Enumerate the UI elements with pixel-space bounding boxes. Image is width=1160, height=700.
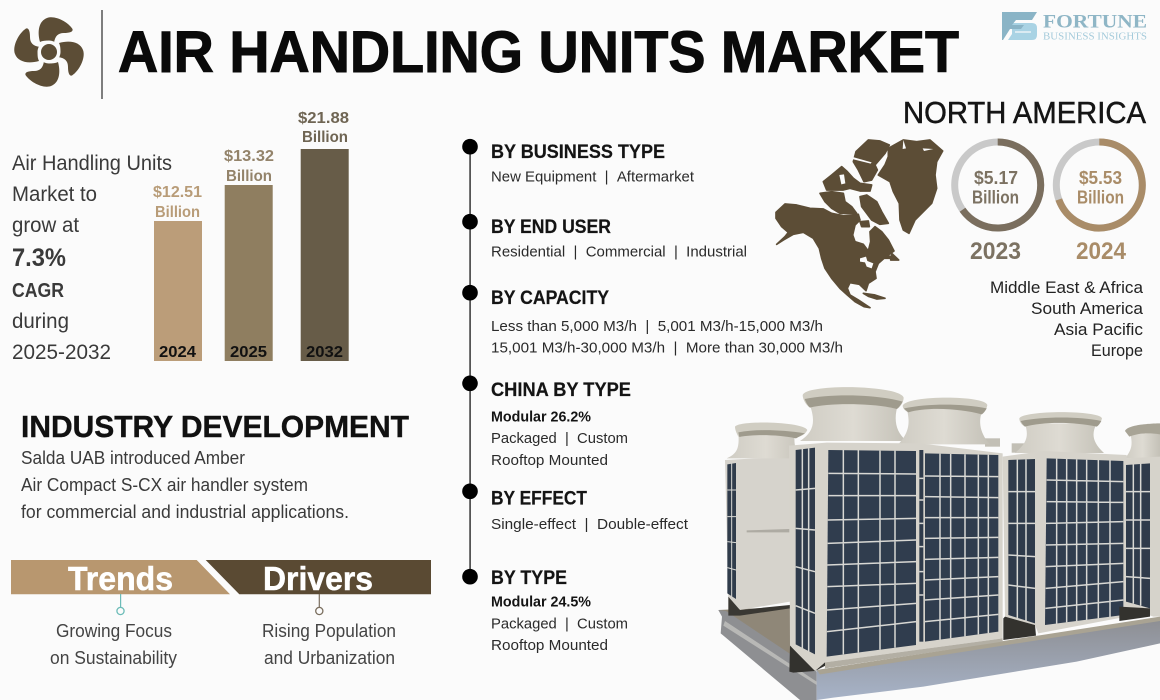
bar: 2025: $13.32: [224, 148, 274, 165]
segment: by type: BY TYPE: [491, 568, 567, 589]
text: market growth summary: 2025-2032: [12, 341, 111, 364]
text: industry development detail: Air Compact S-CX air handler system: [21, 475, 308, 495]
bar: 2025: [224, 148, 274, 361]
bar: 2032: Billion: [302, 129, 348, 146]
segment: by type: Rooftop Mounted: [491, 637, 608, 654]
chart: 2023 ring: Billion: [972, 188, 1019, 208]
text: market growth summary: 7.3%: [12, 244, 66, 272]
segment: by type: Packaged | Custom: [491, 615, 628, 632]
text: other regions: Asia Pacific: [1054, 320, 1143, 339]
bar: 2024: Billion: [155, 204, 200, 221]
segment: by capacity: 15,001 M3/h-30,000 M3/h | More than 30,000 M3/h: [491, 340, 843, 357]
segment: by effect: BY EFFECT: [491, 488, 587, 509]
panel: trends: [11, 560, 230, 668]
panel: drivers: [206, 560, 431, 668]
segment: by type: Modular 24.5%: [491, 594, 591, 611]
bar: 2025: 2025: [230, 344, 267, 361]
logo: Fortune Business Insights: FORTUNE: [1043, 12, 1147, 32]
segment: china by type: CHINA BY TYPE: [491, 380, 631, 401]
title: AIR HANDLING UNITS MARKET: [118, 20, 959, 85]
bar: 2025: Billion: [226, 168, 272, 185]
small back fans: [985, 438, 1025, 453]
bar: 2032: $21.88: [298, 110, 349, 127]
segment: by business type: BY BUSINESS TYPE: [491, 142, 665, 163]
panel: trends: on Sustainability: [50, 648, 177, 668]
segment: by capacity: BY CAPACITY: [491, 288, 609, 309]
back left unit: [725, 423, 807, 616]
heading: industry development: INDUSTRY DEVELOPMENT: [21, 409, 409, 444]
segment: china by type: [462, 376, 631, 469]
panel: drivers: Rising Population: [262, 621, 396, 641]
text: industry development detail: [21, 448, 349, 522]
text: market growth summary: during: [12, 310, 69, 333]
text: market growth summary: Market to: [12, 183, 97, 206]
logo: Fortune Business Insights: BUSINESS INSIGHTS: [1043, 32, 1147, 42]
segment: by capacity: [462, 285, 843, 357]
chart: 2024 ring: 2024: [1076, 238, 1127, 265]
chart: 2023 ring: 2023: [970, 238, 1021, 265]
chart: 2023 ring: [955, 142, 1041, 265]
chart: 2024 ring: $5.53: [1079, 168, 1122, 188]
chart: 2023 ring: $5.17: [974, 168, 1018, 188]
panel: drivers: Drivers: [263, 560, 373, 597]
front unit C: [1119, 457, 1160, 621]
segment: by end user: [462, 214, 747, 261]
chart: 2024 ring: Billion: [1077, 188, 1124, 208]
fan housings: [800, 387, 1160, 458]
icon: fan: [14, 17, 84, 87]
text: other regions: South America: [1031, 299, 1144, 318]
front unit B: [1003, 451, 1127, 640]
bar: 2024: $12.51: [153, 184, 202, 201]
front unit A: [789, 443, 1003, 673]
segment: china by type: Packaged | Custom: [491, 430, 628, 447]
segment: by end user: Residential | Commercial | Industrial: [491, 244, 747, 261]
text: industry development detail: for commercial and industrial applications.: [21, 502, 349, 522]
bar: 2024: [153, 184, 202, 361]
text: other regions: Middle East & Africa: [990, 278, 1144, 297]
panel: trends: Trends: [68, 560, 173, 597]
bar chart: market size: [153, 110, 349, 361]
panel: trends: Growing Focus: [56, 621, 172, 641]
bar: 2032: [298, 110, 349, 361]
illustration: rooftop air handling units: [718, 387, 1160, 700]
text: market growth summary: grow at: [12, 214, 79, 237]
chart: 2024 ring: [1056, 142, 1142, 265]
timeline: segments: [462, 139, 843, 654]
logo: Fortune Business Insights: [1002, 12, 1147, 42]
roof platform: [718, 607, 1160, 700]
segment: by capacity: Less than 5,000 M3/h | 5,001 M3/h-15,000 M3/h: [491, 318, 823, 335]
map: north america: [776, 140, 943, 308]
segment: by end user: BY END USER: [491, 217, 611, 238]
text: market growth summary: [12, 152, 172, 364]
segment: by business type: New Equipment | Aftermarket: [491, 169, 695, 186]
text: market growth summary: CAGR: [12, 280, 64, 302]
segment: by effect: Single-effect | Double-effect: [491, 516, 689, 533]
bar: 2032: 2032: [306, 344, 343, 361]
segment: by effect: [462, 484, 689, 533]
segment: by business type: [462, 139, 695, 186]
panel: drivers: and Urbanization: [264, 648, 395, 668]
segment: china by type: Modular 26.2%: [491, 409, 591, 426]
text: other regions: Europe: [1091, 341, 1143, 360]
text: industry development detail: Salda UAB introduced Amber: [21, 448, 245, 468]
segment: by type: [462, 568, 628, 654]
text: market growth summary: Air Handling Units: [12, 152, 172, 175]
segment: china by type: Rooftop Mounted: [491, 452, 608, 469]
bar: 2024: 2024: [159, 344, 196, 361]
text: other regions: [990, 278, 1144, 360]
heading: north america: NORTH AMERICA: [903, 95, 1146, 130]
